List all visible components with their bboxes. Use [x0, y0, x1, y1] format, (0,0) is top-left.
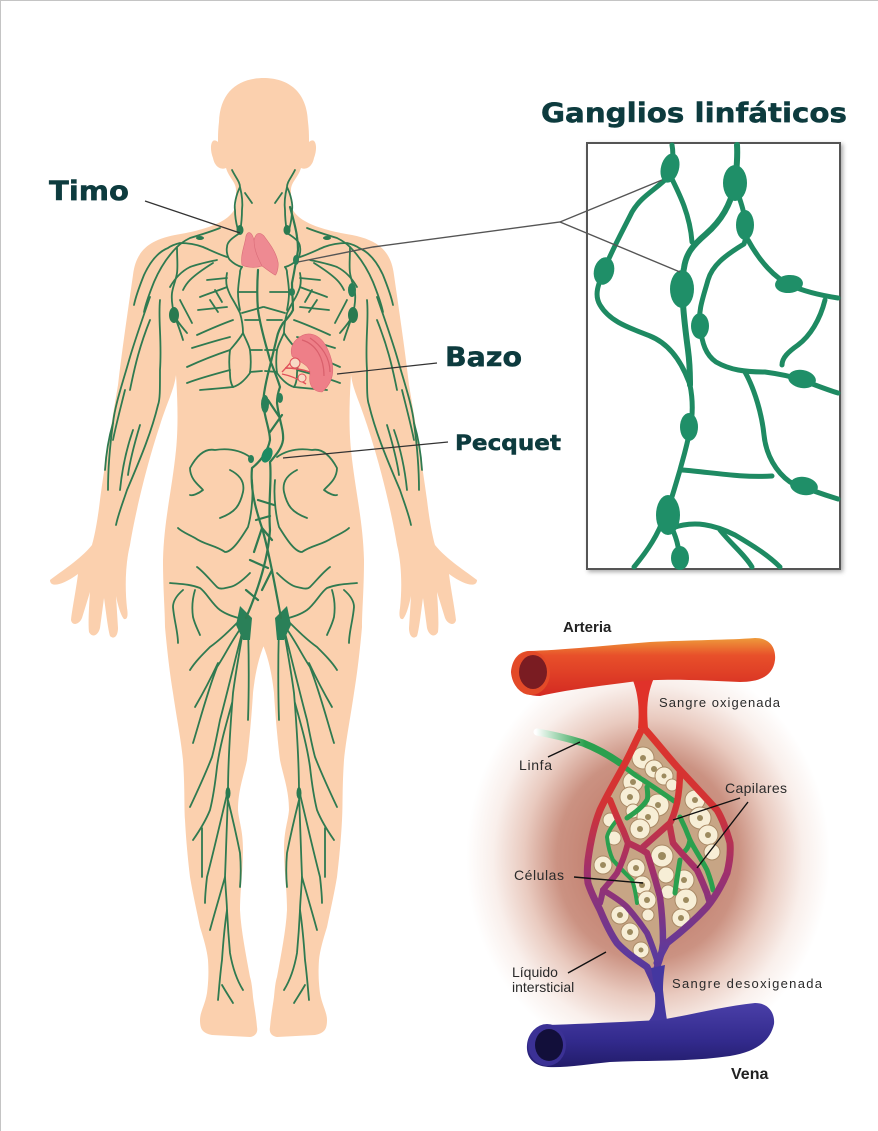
label: Linfa: Linfa [519, 757, 552, 773]
human body with lymphatic system [50, 78, 477, 1037]
lymph vessels [537, 732, 713, 903]
label: Arteria: Arteria [563, 619, 612, 636]
label: Sangre desoxigenada: Sangre desoxigenada [672, 976, 823, 991]
cells [594, 747, 720, 958]
label: Líquido intersticial: intersticial [512, 979, 574, 995]
label: Líquido intersticial: Líquido [512, 964, 558, 980]
label: Pecquet: Pecquet [455, 431, 561, 455]
label: Bazo: Bazo [445, 342, 522, 373]
panel: lymph node detail [587, 143, 840, 570]
leader line: Pecquet [283, 442, 448, 458]
vein [527, 965, 774, 1067]
interstitial fluid glow [466, 653, 830, 1063]
organ: spleen [282, 334, 333, 392]
body silhouette [50, 78, 477, 1037]
lymphatic network right side [264, 170, 422, 1003]
title: Ganglios linfáticos: Ganglios linfáticos [541, 98, 847, 129]
panel: capillary bed diagram [466, 619, 830, 1083]
leader line: Timo [145, 201, 240, 233]
lymphatic network left side [105, 170, 263, 1003]
lymph nodes [591, 151, 819, 570]
pointer arrows [548, 742, 748, 973]
cell nuclei [600, 755, 711, 952]
lymph nodes along trunk [248, 255, 356, 464]
artery [511, 638, 775, 728]
organ: thymus [242, 233, 278, 275]
label: Vena: Vena [731, 1066, 768, 1083]
central lymph trunks [246, 207, 298, 618]
capillaries [587, 727, 730, 990]
label: Capilares: Capilares [725, 780, 787, 796]
label: Timo: Timo [49, 176, 129, 207]
label: Células: Células [514, 867, 564, 883]
tissue area [588, 727, 729, 968]
lymph vessels [597, 145, 838, 567]
leader line: Bazo [337, 363, 437, 374]
panel frame [587, 143, 840, 569]
leader lines: body to lymph node panel [298, 180, 680, 272]
label: Sangre oxigenada: Sangre oxigenada [659, 695, 781, 710]
